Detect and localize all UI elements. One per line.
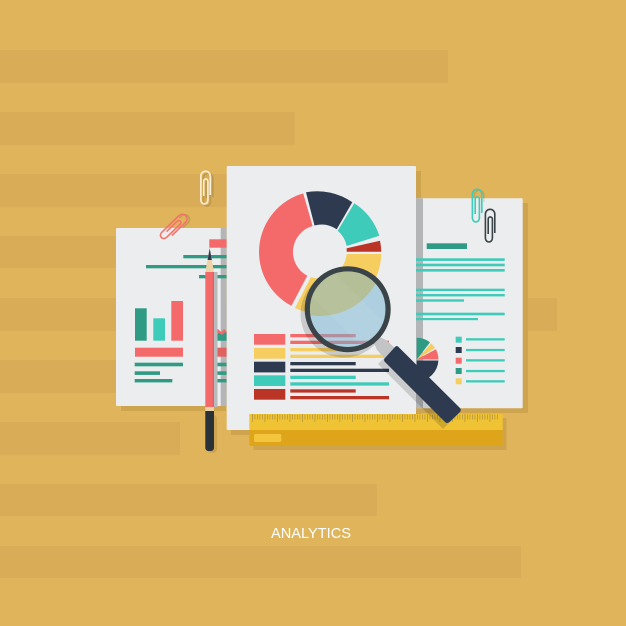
pie legend <box>456 337 505 384</box>
pie chart <box>417 338 438 381</box>
panel: right document <box>416 198 528 413</box>
magnifier shadow <box>300 270 457 429</box>
left document header block <box>209 239 227 248</box>
small area chart <box>214 329 227 341</box>
icon: coral paper clip <box>159 211 191 243</box>
icon: dark paper clip <box>485 209 495 242</box>
icon: teal paper clip <box>472 189 484 222</box>
table legend <box>254 334 389 400</box>
left document text lines <box>135 255 227 382</box>
panel: left document <box>116 228 227 411</box>
magnifier lens <box>304 266 391 352</box>
donut chart <box>259 191 381 314</box>
title: ANALYTICS <box>271 525 351 542</box>
right document heading <box>427 243 467 249</box>
icon: magnifying glass <box>300 266 461 429</box>
chart caption bar <box>135 348 227 357</box>
icon: cream paper clip <box>201 171 213 206</box>
icon: pencil <box>205 248 218 453</box>
bar chart <box>135 301 183 341</box>
right document text lines <box>416 258 505 320</box>
panel: main document <box>227 166 416 430</box>
magnifier handle <box>374 337 461 423</box>
icon: ruler <box>249 414 507 450</box>
